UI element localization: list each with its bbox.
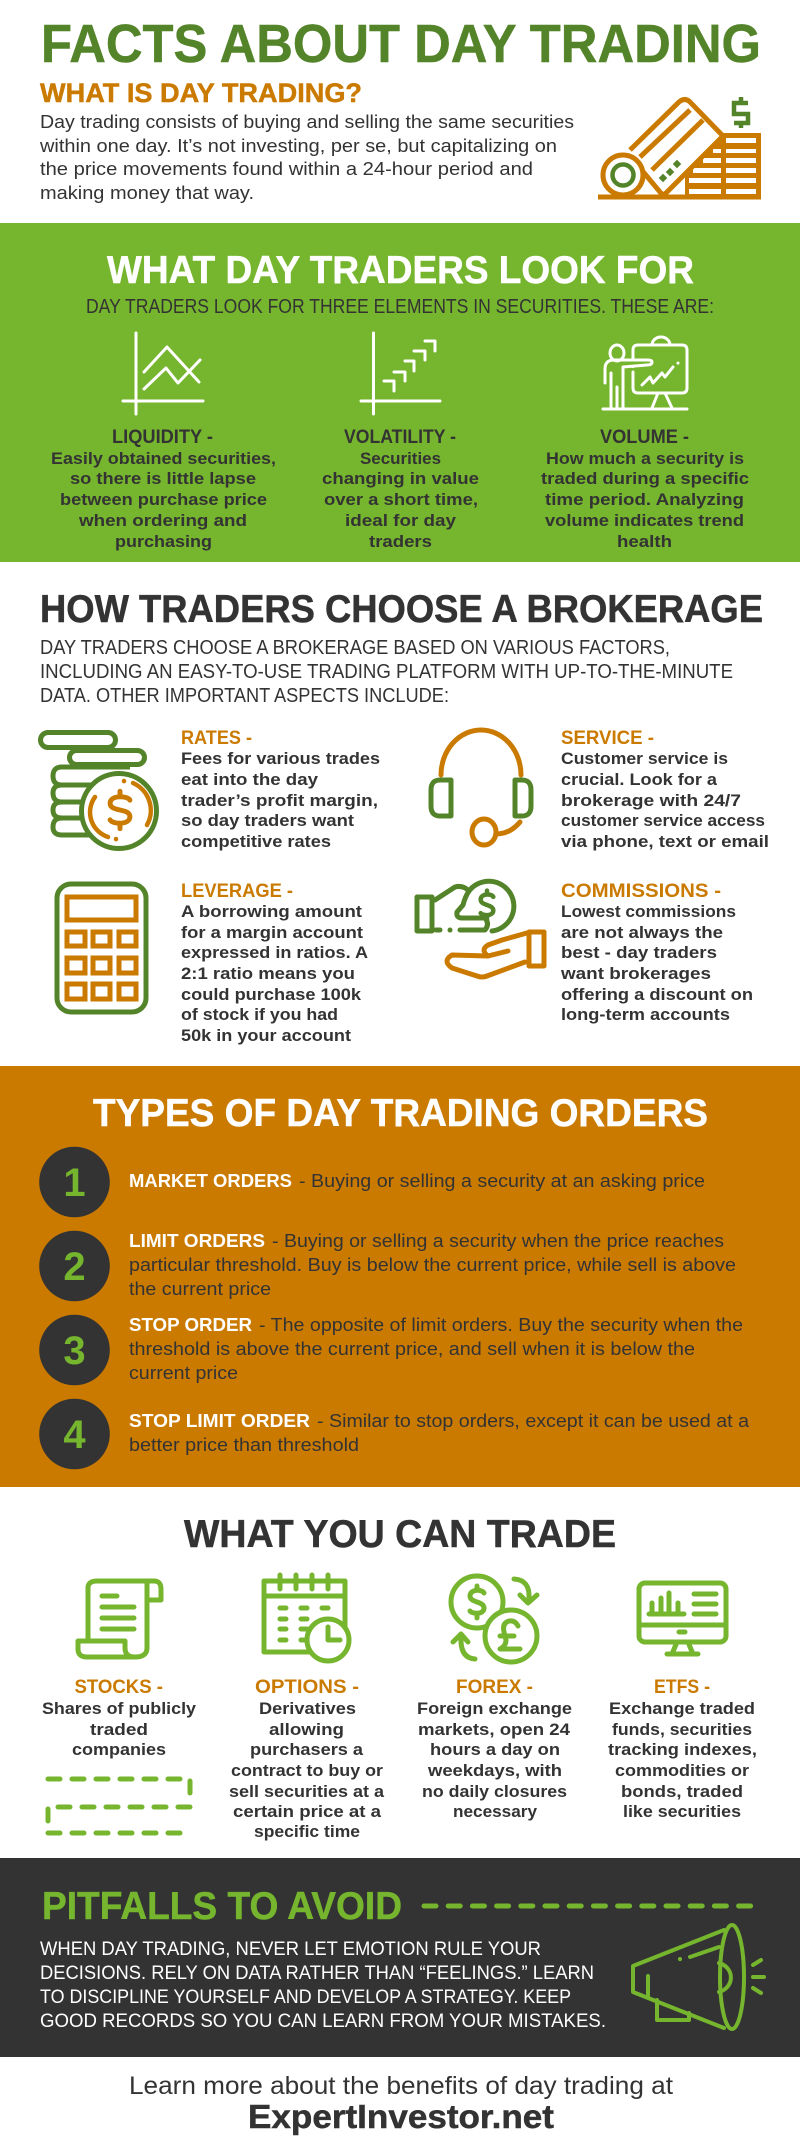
order: stop limit order: - Similar to stop orders, except it can be used at a [317,1411,750,1431]
panel: types of day trading orders [0,1066,800,1487]
heading: types of day trading orders: TYPES OF DAY TRADING ORDERS [93,1092,708,1135]
panel: what is day trading [39,78,761,203]
column: stocks [42,1677,197,1759]
column: volume: traded during a specific [541,469,749,488]
text: commissions: are not always the [561,923,723,942]
order: market orders [129,1171,705,1191]
brokerage intro text: INCLUDING AN EASY-TO-USE TRADING PLATFORM WITH UP-TO-THE-MINUTE [40,661,733,683]
column: etfs: ETFS - [654,1677,710,1698]
text: service: brokerage with 24/7 [561,791,741,810]
column: stocks: Shares of publicly [42,1699,197,1718]
column: stocks: companies [72,1740,166,1759]
text: commissions: Lowest commissions [561,902,736,921]
column: forex: hours a day on [430,1740,560,1759]
intro text block: the price movements found within a 24-hour period and [40,158,533,179]
dashed rule [424,1904,762,1908]
column: liquidity: purchasing [115,532,212,551]
order: stop order: STOP ORDER [129,1315,252,1335]
icon: scroll document [78,1581,161,1657]
panel: what day traders look for [0,223,800,562]
text: leverage: expressed in ratios. A [181,943,368,962]
column: forex [417,1677,572,1821]
panel: how traders choose a brokerage [40,588,769,1045]
column: forex: markets, open 24 [418,1720,571,1739]
text: commissions: want brokerages [560,964,711,983]
icon: presenter at chart board [603,337,687,409]
order: stop limit order: better price than threshold [129,1435,359,1455]
order: stop order: current price [129,1363,238,1383]
number badge 4: 4 [63,1413,86,1457]
number badge 3 [39,1315,110,1385]
column: volatility: traders [369,532,432,551]
number badge 1: 1 [63,1161,86,1205]
text: leverage: for a margin account [181,923,363,942]
column: options: Derivatives [259,1699,356,1718]
text: leverage: could purchase 100k [181,985,362,1004]
text: leverage: 50k in your account [181,1026,351,1045]
text: rates: Fees for various trades [181,749,380,768]
icon: volatility chart [361,333,440,414]
text: commissions: long-term accounts [561,1005,730,1024]
column: liquidity [51,427,276,551]
text: service: SERVICE - [561,728,654,749]
text: commissions: best - day traders [561,943,717,962]
number badge 2: 2 [63,1245,86,1289]
column: etfs: funds, securities [612,1720,752,1739]
pitfalls text block: GOOD RECORDS SO YOU CAN LEARN FROM YOUR MISTAKES. [40,2010,606,2032]
icon: calculator [57,884,146,1012]
text: rates: competitive rates [181,832,331,851]
heading: what day traders look for: WHAT DAY TRADERS LOOK FOR [107,249,694,292]
icon: calendar and clock [264,1575,349,1661]
text: commissions [560,881,753,1024]
brokerage intro text: DATA. OTHER IMPORTANT ASPECTS INCLUDE: [40,685,449,707]
text: service: customer service access [561,811,765,830]
footer [129,2072,673,2135]
text: rates: RATES - [181,728,252,749]
column: volatility: VOLATILITY - [344,427,456,448]
column: forex: Foreign exchange [417,1699,572,1718]
column: liquidity: so there is little lapse [70,469,256,488]
pitfalls text block: WHEN DAY TRADING, NEVER LET EMOTION RULE YOUR [40,1938,541,1960]
icon: hands exchanging money [417,881,544,977]
pitfalls text block: TO DISCIPLINE YOURSELF AND DEVELOP A STRATEGY. KEEP [40,1986,571,2008]
text: service [561,728,769,851]
text: rates [181,728,380,851]
order: limit orders: particular threshold. Buy is below the current price, while sell is above [129,1255,736,1275]
column: forex: weekdays, with [427,1761,562,1780]
icon: credit card, roll and coin stack [598,97,761,197]
column: volatility: ideal for day [345,511,457,530]
subheading: DAY TRADERS LOOK FOR THREE ELEMENTS IN SECURITIES. THESE ARE: [86,296,714,318]
order: limit orders: the current price [129,1279,271,1299]
number badge 1 [39,1147,110,1217]
title: FACTS ABOUT DAY TRADING [41,14,761,74]
text: commissions: offering a discount on [561,985,753,1004]
column: forex: necessary [453,1802,538,1821]
column: options: OPTIONS - [255,1677,359,1698]
column: liquidity: Easily obtained securities, [51,449,276,468]
text: leverage: 2:1 ratio means you [181,964,355,983]
icon: headset [431,730,531,845]
dashed connector [48,1779,190,1833]
icon: megaphone [633,1925,764,2029]
text: leverage: A borrowing amount [181,902,362,921]
column: liquidity: LIQUIDITY - [112,427,213,448]
column: options: certain price at a [233,1802,382,1821]
text: rates: trader’s profit margin, [181,791,378,810]
number badge 3: 3 [63,1329,86,1373]
order: limit orders: LIMIT ORDERS [129,1231,265,1251]
column: volatility: changing in value [322,469,479,488]
pitfalls text block: DECISIONS. RELY ON DATA RATHER THAN “FEELINGS.” LEARN [40,1962,594,1984]
column: volume: health [617,532,672,551]
column: liquidity: when ordering and [78,511,247,530]
column: volatility: Securities [360,449,441,468]
text: leverage: LEVERAGE - [181,881,293,902]
text: rates: eat into the day [181,770,319,789]
heading: what you can trade: WHAT YOU CAN TRADE [184,1513,616,1556]
order: stop order: threshold is above the current price, and sell when it is below the [129,1339,695,1359]
icon: monitor with chart [639,1583,726,1654]
intro text block [39,111,574,203]
column: options [229,1677,385,1841]
column: volume: volume indicates trend [545,511,744,530]
pitfalls text block [40,1938,606,2032]
brokerage intro text: DAY TRADERS CHOOSE A BROKERAGE BASED ON VARIOUS FACTORS, [40,637,670,659]
column: etfs: tracking indexes, [608,1740,757,1759]
column: options: allowing [269,1720,344,1739]
icon: coin stack [40,732,156,848]
column: etfs: like securities [623,1802,741,1821]
website name: ExpertInvestor.net [248,2098,554,2135]
order: market orders: - Buying or selling a security at an asking price [299,1171,705,1191]
column: volume: VOLUME - [600,427,689,448]
order: limit orders [129,1231,736,1299]
column: options: sell securities at a [229,1782,385,1801]
column: volatility: over a short time, [324,490,478,509]
intro text block: making money that way. [40,182,254,203]
panel: what you can trade [42,1513,757,1841]
column: forex: FOREX - [456,1677,533,1698]
brokerage intro text [40,637,733,707]
column: etfs [608,1677,757,1821]
column: options: purchasers a [250,1740,364,1759]
intro text block: Day trading consists of buying and selling the same securities [40,111,574,132]
heading: how traders choose a brokerage: HOW TRADERS CHOOSE A BROKERAGE [40,588,763,631]
column: options: specific time [254,1822,360,1841]
panel: pitfalls to avoid [0,1858,800,2057]
text: service: via phone, text or email [561,832,769,851]
column: volume: How much a security is [546,449,744,468]
column: volume: time period. Analyzing [545,490,744,509]
column: stocks: traded [90,1720,148,1739]
icon: currency exchange [451,1576,537,1662]
number badge 4 [39,1399,110,1469]
column: etfs: Exchange traded [609,1699,755,1718]
order: stop limit order: STOP LIMIT ORDER [129,1411,310,1431]
text: rates: so day traders want [181,811,354,830]
text: commissions: COMMISSIONS - [561,881,721,902]
intro text block: within one day. It’s not investing, per se, but capitalizing on [39,135,557,156]
column: volume [541,427,749,551]
footer line: Learn more about the benefits of day trading at [129,2072,673,2100]
order: stop order: - The opposite of limit orders. Buy the security when the [259,1315,743,1335]
icon: liquidity chart [123,333,203,414]
column: liquidity: between purchase price [60,490,267,509]
column: forex: no daily closures [422,1782,567,1801]
order: stop limit order [129,1411,750,1455]
column: options: contract to buy or [231,1761,383,1780]
heading: pitfalls to avoid: PITFALLS TO AVOID [42,1885,402,1928]
order: limit orders: - Buying or selling a security when the price reaches [272,1231,724,1251]
number badge 2 [39,1231,110,1301]
column: etfs: bonds, traded [621,1782,743,1801]
column: stocks: STOCKS - [74,1677,163,1698]
text: leverage [181,881,368,1045]
column: etfs: commodities or [615,1761,749,1780]
text: service: crucial. Look for a [561,770,718,789]
heading: what is day trading: WHAT IS DAY TRADING? [40,78,362,108]
text: service: Customer service is [561,749,728,768]
column: volatility [322,427,479,551]
text: leverage: of stock if you had [181,1005,338,1024]
order: market orders: MARKET ORDERS [129,1171,292,1191]
order: stop order [129,1315,743,1383]
